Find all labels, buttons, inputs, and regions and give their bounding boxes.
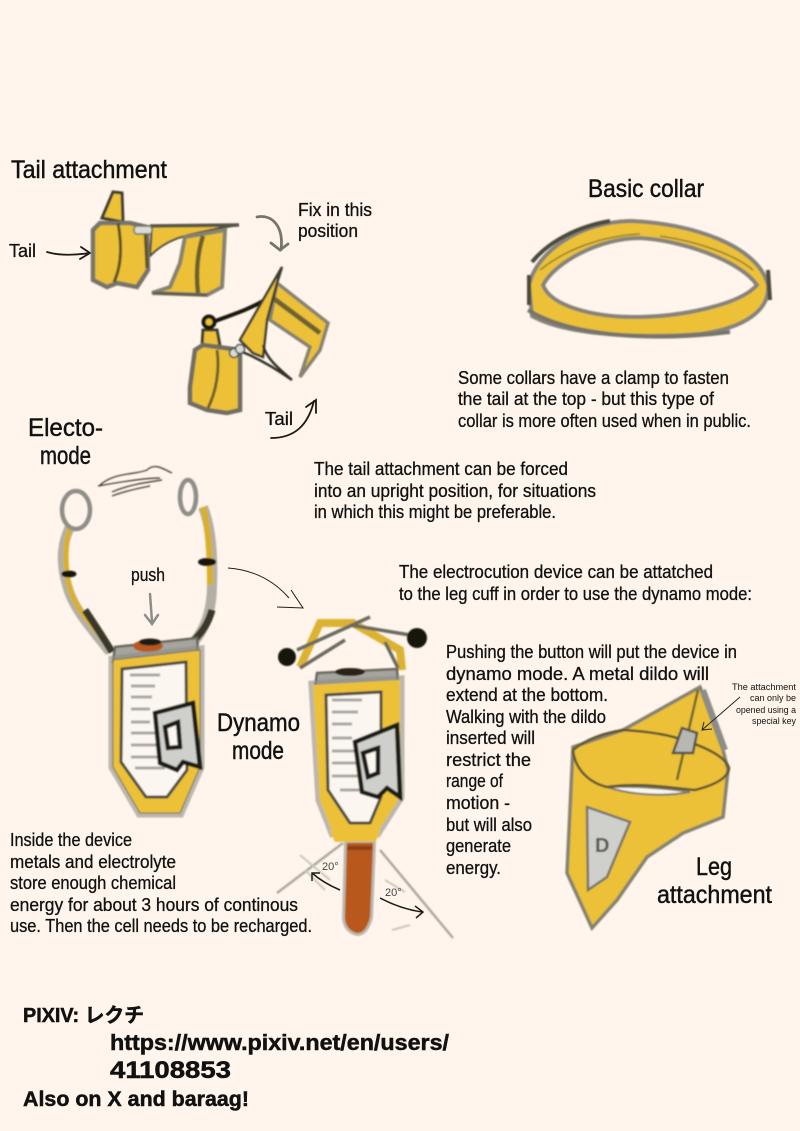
text: chemical energy note: store enough chemical [10,872,176,893]
illustration: tail attachment resting [93,192,239,295]
arrow: callout pointer [702,697,740,730]
illustration: device in dynamo mode [277,617,453,938]
illustration: leg attachment [567,687,729,928]
credits: PIXIV: レクチ [23,1004,144,1027]
text: collar note: the tail at the top - but this type of [458,388,715,409]
text: collar note [458,367,751,431]
callout: special key: The attachment [732,682,796,692]
heading: leg attachment: attachment [657,881,772,909]
callout: special key: opened using a [736,705,796,715]
heading: leg attachment: Leg [696,853,732,881]
text: dynamo mode note: range of [446,770,504,791]
heading: dynamo mode [217,709,300,765]
callout: special key: can only be [750,693,796,703]
heading: electro-mode: Electo- [28,414,103,442]
text: dynamo mode note: extend at the bottom. [446,684,608,705]
label: tail: Tail [9,240,36,261]
arrow: push button [145,594,158,624]
heading: electro-mode [28,414,103,470]
text: electrocution device note: The electrocution device can be attatched [399,561,713,582]
arrow: swing left 20 degrees [312,873,340,890]
text: chemical energy note: Inside the device [10,829,132,850]
text: dynamo mode note: but will also [446,814,532,835]
callout: special key [732,682,796,726]
text: upright note [314,458,596,522]
text: dynamo mode note: Pushing the button will put the device in [446,641,737,662]
text: collar note: collar is more often used when in public. [458,410,751,431]
credits: Also on X and baraag! [23,1088,249,1111]
label: 20 degrees left: 20° [322,861,339,873]
credits: https://www.pixiv.net/en/users/ [110,1030,449,1055]
label: tail, upright: Tail [265,408,293,429]
heading: basic collar: Basic collar [588,175,704,203]
text: dynamo mode note: Walking with the dildo [446,706,606,727]
text: electrocution device note: to the leg cuff in order to use the dynamo mode: [399,583,752,604]
text: electrocution device note [399,561,752,604]
text: chemical energy note [10,829,312,936]
heading: dynamo mode: mode [232,737,284,765]
arrow: tail upward [271,400,316,438]
text: dynamo mode note [446,641,737,878]
arrow: tail to attachment [47,247,90,259]
text: dynamo mode note: restrict the [446,749,531,770]
heading: leg attachment [657,853,772,909]
label: fix in this position [298,199,372,241]
text: chemical energy note: use. Then the cell needs to be recharged. [10,915,312,936]
text: dynamo mode note: dynamo mode. A metal dildo will [446,663,709,684]
credits [23,1004,449,1111]
text: dynamo mode note: inserted will [446,727,535,748]
heading: tail attachment: Tail attachment [11,156,167,184]
arrow: rotate into position [257,217,288,250]
illustration: leg attachment: D [595,835,609,857]
arrow: electro-mode to dynamo mode [228,568,303,608]
text: collar note: Some collars have a clamp to fasten [458,367,729,388]
text: upright note: The tail attachment can be forced [314,458,568,479]
label: 20 degrees right: 20° [385,887,402,899]
text: chemical energy note: metals and electrolyte [10,851,176,872]
text: upright note: in which this might be preferable. [314,501,556,522]
illustration: device in electro-mode [62,467,216,813]
label: fix in this position: position [298,220,358,241]
illustration: basic collar [528,221,770,337]
label: fix in this position: Fix in this [298,199,372,220]
heading: electro-mode: mode [40,442,91,470]
text: upright note: into an upright position, for situations [314,480,596,501]
text: chemical energy note: energy for about 3 hours of continous [10,894,298,915]
text: dynamo mode note: motion - [446,792,510,813]
illustration: tail attachment upright [190,267,328,413]
text: dynamo mode note: generate [446,835,511,856]
callout: special key: special key [752,716,796,726]
text: dynamo mode note: energy. [446,857,501,878]
label: push: push [131,564,165,585]
heading: dynamo mode: Dynamo [217,709,300,737]
credits: 41108853 [110,1057,231,1084]
arrow: swing right 20 degrees [380,898,423,918]
